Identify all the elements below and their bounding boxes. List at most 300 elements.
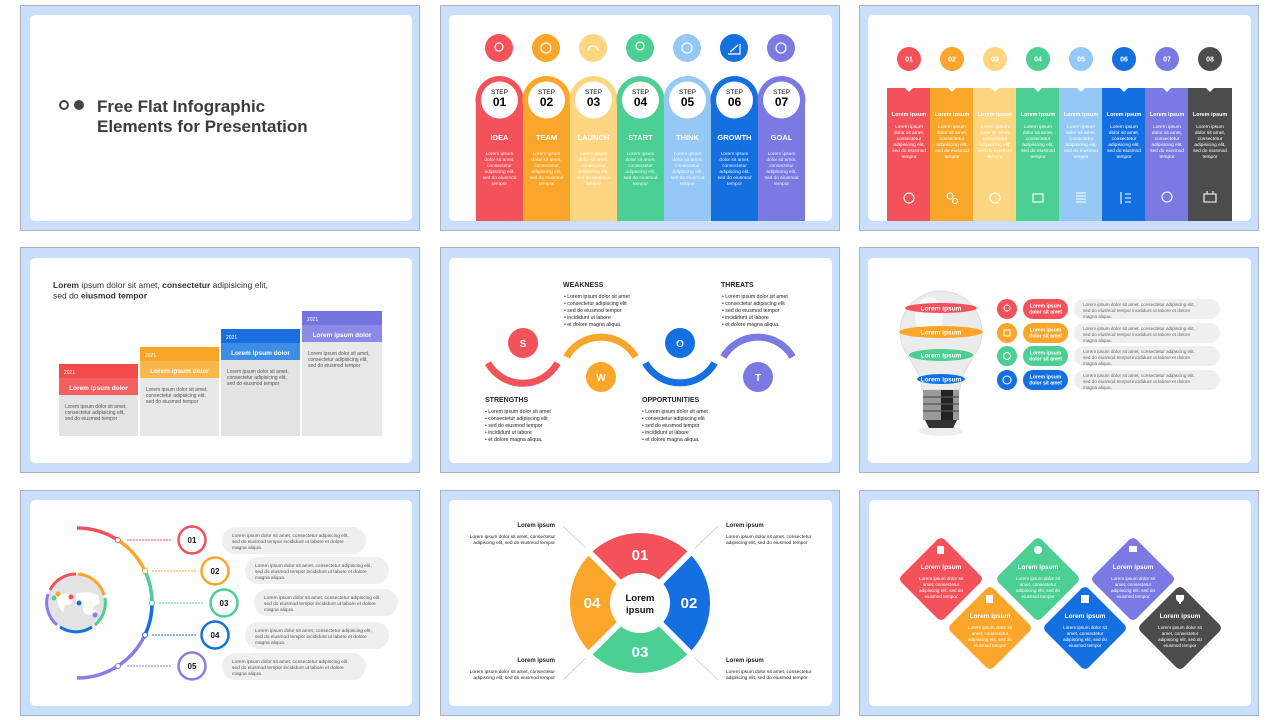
- corner texts: Lorem ipsum: [726, 658, 764, 664]
- step bar 1: [59, 364, 138, 436]
- text: opportunities: • et dolore magna aliqua.: [642, 437, 699, 443]
- number circles: 04: [1034, 56, 1042, 64]
- column texts: Lorem ipsum: [1153, 125, 1181, 130]
- text: weakness: • Lorem ipsum dolor sit amet: [564, 294, 630, 300]
- list rows: magna aliqua.: [1083, 338, 1112, 343]
- diamond texts: adipiscing elit, sed do: [1111, 588, 1155, 593]
- column texts: dolor sit amet,: [980, 130, 1010, 136]
- step bar 3: Lorem ipsum dolor sit amet,: [227, 369, 289, 375]
- diamond texts: eiusmod tempor: [1117, 594, 1150, 599]
- diamond icons: [937, 546, 1184, 604]
- step bar 4: Lorem ipsum dolor sit amet,: [308, 351, 370, 357]
- column texts: adipisicing elit,: [1022, 142, 1054, 148]
- numbered circles: 02: [211, 567, 220, 576]
- diamond texts: Lorem ipsum dolor sit: [1063, 625, 1107, 630]
- text: strengths: • consectetur adipiscing elit: [485, 416, 548, 422]
- step bars: TEAM: [536, 133, 557, 142]
- diamond texts: eiusmod tempor: [1164, 643, 1197, 648]
- step bar 3: [221, 329, 300, 436]
- text: opportunities: • Lorem ipsum dolor sit amet: [642, 409, 708, 415]
- text: opportunities: • sed do eiusmod tempor: [642, 423, 700, 429]
- step bars: 01: [493, 95, 506, 109]
- step texts: sed do eiusmod: [624, 175, 658, 181]
- step texts: consectetur: [487, 163, 512, 169]
- SWOT circles: [508, 328, 773, 392]
- step bars: GROWTH: [717, 133, 752, 142]
- step texts: consectetur: [628, 163, 653, 169]
- step bars: IDEA: [491, 133, 509, 142]
- column texts: adipisicing elit,: [1194, 142, 1226, 148]
- SWOT circles: T: [755, 373, 761, 384]
- step bar 1: 2021: [64, 370, 75, 376]
- column texts: Lorem ipsum: [938, 125, 966, 130]
- column texts: Lorem ipsum: [1110, 125, 1138, 130]
- step texts: Lorem ipsum: [533, 152, 560, 157]
- column texts: sed do eiusmod: [1193, 148, 1227, 154]
- text: opportunities: OPPORTUNITIES: [642, 397, 700, 404]
- list rows: Lorem ipsum dolor sit amet, consectetur adipiscing elit,: [1083, 302, 1195, 307]
- diamond texts: amet, consectetur: [1020, 582, 1057, 587]
- step texts: sed do eiusmod: [671, 175, 705, 181]
- step bars: 02: [540, 95, 553, 109]
- corner texts: adipiscing elit, sed do eiusmod tempor: [473, 675, 555, 681]
- diamond texts: eiusmod tempor: [1022, 594, 1055, 599]
- step texts: adipiscing elit,: [625, 169, 656, 175]
- gray text pills: Lorem ipsum dolor sit amet, consectetur adipiscing elit,: [255, 629, 372, 634]
- column texts: sed do eiusmod: [1064, 148, 1098, 154]
- ring labels: 01: [632, 547, 648, 564]
- column texts: Lorem ipsum: [1196, 125, 1224, 130]
- diamond texts: Lorem ipsum dolor sit: [1016, 576, 1060, 581]
- list rows: Lorem ipsum dolor sit amet, consectetur adipiscing elit,: [1083, 373, 1195, 378]
- step texts: adipiscing elit,: [531, 169, 562, 175]
- list rows: sed do eiusmod tempor incididunt ut labore et dolore: [1083, 355, 1190, 360]
- gray text pills: magna aliqua.: [232, 671, 262, 677]
- text: threats: • consectetur adipiscing elit: [722, 301, 785, 307]
- column texts: consectetur: [940, 136, 965, 142]
- diamond texts: eiusmod tempor: [925, 594, 958, 599]
- step bar 3: sed do eiusmod tempor: [227, 381, 280, 387]
- step bars: STEP: [538, 89, 555, 96]
- numbered circles: 04: [211, 631, 220, 640]
- text: opportunities: • consectetur adipiscing elit: [642, 416, 705, 422]
- step texts: tempor: [492, 181, 507, 187]
- bulb bands: Lorem ipsum: [921, 330, 962, 336]
- step texts: adipiscing elit,: [766, 169, 797, 175]
- step texts: Lorem ipsum: [674, 152, 701, 157]
- step bars: GOAL: [771, 133, 793, 142]
- ring segments: [570, 533, 710, 673]
- diamond texts: Lorem ipsum: [1065, 613, 1106, 620]
- text: weakness: • et dolore magna aliqua.: [564, 322, 621, 328]
- step bar 2: Lorem ipsum dolor sit amet,: [146, 387, 208, 393]
- list rows: [997, 299, 1220, 390]
- list rows: dolor sit amet: [1029, 356, 1062, 362]
- numbered circles: 05: [188, 662, 197, 671]
- diamond texts: adipiscing elit, sed do: [1016, 588, 1060, 593]
- diamond texts: amet, consectetur: [923, 582, 960, 587]
- gray text pills: Lorem ipsum dolor sit amet, consectetur adipiscing elit,: [255, 564, 372, 569]
- diamond texts: adipiscing elit, sed do: [1158, 637, 1202, 642]
- step texts: dolor sit amet,: [766, 157, 797, 163]
- bulb bands: Lorem ipsum: [921, 306, 962, 312]
- panel: globe arc: [20, 490, 420, 716]
- step bars: 05: [681, 95, 694, 109]
- step bar 4: Lorem ipsum dolor: [313, 332, 372, 339]
- column texts: sed do eiusmod: [1021, 148, 1055, 154]
- step texts: adipiscing elit,: [484, 169, 515, 175]
- gray text pills: magna aliqua.: [264, 607, 294, 613]
- column texts: tempor: [1031, 154, 1046, 160]
- diamond texts: Lorem ipsum dolor sit: [1111, 576, 1155, 581]
- bulb: [899, 291, 983, 436]
- text: strengths: [485, 397, 551, 443]
- title: Elements for Presentation: [97, 117, 308, 136]
- numbered circles: 01: [188, 536, 197, 545]
- step bar 2: consectetur adipisicing elit,: [146, 393, 206, 399]
- column texts: tempor: [902, 154, 917, 160]
- list rows: Lorem ipsum dolor sit amet, consectetur adipiscing elit,: [1083, 349, 1195, 354]
- ring labels: 04: [584, 595, 601, 612]
- list rows: magna aliqua.: [1083, 314, 1112, 319]
- step bar 4: 2021: [307, 317, 318, 323]
- panel: seven steps: [440, 6, 840, 230]
- step texts: consectetur: [581, 163, 606, 169]
- big arc: [77, 528, 152, 678]
- step bar 4: consectetur adipisicing elit,: [308, 357, 368, 363]
- list rows: dolor sit amet: [1029, 380, 1062, 386]
- panel: SWOT wave: [440, 248, 840, 472]
- column texts: consectetur: [1026, 136, 1051, 142]
- step bars: STEP: [679, 89, 696, 96]
- step bar 3: consectetur adipisicing elit,: [227, 375, 287, 381]
- column texts: tempor: [1117, 154, 1132, 160]
- diamond shapes: [898, 536, 1223, 671]
- corner texts: Lorem ipsum dolor sit amet, consectetur: [470, 670, 555, 675]
- step texts: consectetur: [675, 163, 700, 169]
- column texts: dolor sit amet,: [894, 130, 924, 136]
- step bar 2: [140, 347, 219, 436]
- text: threats: • et dolore magna aliqua.: [722, 322, 779, 328]
- ring labels: 03: [632, 644, 648, 661]
- column texts: Lorem ipsum: [892, 112, 926, 118]
- text: threats: • incididunt ut labore: [722, 315, 769, 321]
- list rows: sed do eiusmod tempor incididunt ut labore et dolore: [1083, 379, 1190, 384]
- column texts: Lorem ipsum: [1024, 125, 1052, 130]
- diamond texts: Lorem ipsum: [921, 564, 962, 571]
- step texts: tempor: [774, 181, 789, 187]
- diamond texts: amet, consectetur: [972, 631, 1009, 636]
- column texts: tempor: [1074, 154, 1089, 160]
- step bar 1: sed do eiusmod tempor: [65, 416, 118, 422]
- gray text pills: magna aliqua.: [255, 640, 285, 646]
- text: opportunities: [642, 397, 708, 443]
- text: weakness: [563, 282, 630, 328]
- column texts: adipisicing elit,: [979, 142, 1011, 148]
- columns: [887, 88, 1232, 221]
- panel: title slide: [20, 6, 420, 230]
- number circles: 07: [1163, 56, 1171, 64]
- gray text pills: sed do eiusmod tempor incididunt ut labore et dolore: [232, 539, 344, 545]
- diamond texts: eiusmod tempor: [974, 643, 1007, 648]
- text: threats: • Lorem ipsum dolor sit amet: [722, 294, 788, 300]
- step texts: consectetur: [722, 163, 747, 169]
- column texts: Lorem ipsum: [895, 125, 923, 130]
- SWOT circles: W: [596, 373, 606, 384]
- list rows: Lorem ipsum dolor sit amet, consectetur adipiscing elit,: [1083, 326, 1195, 331]
- diagonal lines: [563, 526, 718, 680]
- step texts: Lorem ipsum: [721, 152, 748, 157]
- step bar 2: 2021: [145, 353, 156, 359]
- column texts: [892, 112, 1227, 160]
- column texts: dolor sit amet,: [1023, 130, 1053, 136]
- gray text pills: Lorem ipsum dolor sit amet, consectetur adipiscing elit,: [232, 534, 349, 539]
- column texts: Lorem ipsum: [1193, 112, 1227, 118]
- number circles: 05: [1077, 56, 1085, 64]
- step texts: dolor sit amet,: [719, 157, 750, 163]
- step texts: Lorem ipsum: [580, 152, 607, 157]
- step bars: 06: [728, 95, 741, 109]
- text: strengths: • incididunt ut labore: [485, 430, 532, 436]
- text: threats: • sed do eiusmod tempor: [722, 308, 780, 314]
- panel: stepped bars: [20, 248, 420, 472]
- number circles: [897, 47, 1222, 71]
- step texts: dolor sit amet,: [672, 157, 703, 163]
- bulb bands: Lorem ipsum: [921, 352, 962, 360]
- corner texts: Lorem ipsum dolor sit amet, consectetur: [726, 670, 811, 675]
- column texts: tempor: [1160, 154, 1175, 160]
- ring labels: 02: [681, 595, 697, 612]
- step texts: Lorem ipsum: [486, 152, 513, 157]
- step bars: 03: [587, 95, 600, 109]
- text: weakness: WEAKNESS: [563, 282, 604, 289]
- numbered circles: [178, 526, 238, 680]
- text: strengths: • sed do eiusmod tempor: [485, 423, 543, 429]
- step bars: THINK: [676, 133, 700, 142]
- column texts: Lorem ipsum: [1107, 112, 1141, 118]
- step texts: dolor sit amet,: [578, 157, 609, 163]
- diamond texts: amet, consectetur: [1162, 631, 1199, 636]
- diamond texts: Lorem ipsum dolor sit: [968, 625, 1012, 630]
- step bars: [476, 76, 806, 221]
- corner texts: Lorem ipsum dolor sit amet, consectetur: [726, 535, 811, 540]
- step bar 3: Lorem ipsum dolor: [231, 350, 290, 357]
- step texts: sed do eiusmod: [765, 175, 799, 181]
- column texts: dolor sit amet,: [1066, 130, 1096, 136]
- column texts: sed do eiusmod: [1107, 148, 1141, 154]
- column texts: Lorem ipsum: [1150, 112, 1184, 118]
- step bar 2: sed do eiusmod tempor: [146, 399, 199, 405]
- wave arcs: [488, 337, 793, 383]
- step texts: sed do eiusmod: [718, 175, 752, 181]
- diamond texts: Lorem ipsum dolor sit: [919, 576, 963, 581]
- gray text pills: Lorem ipsum dolor sit amet, consectetur adipiscing elit,: [232, 660, 349, 665]
- step texts: dolor sit amet,: [484, 157, 515, 163]
- column texts: tempor: [945, 154, 960, 160]
- text: threats: [721, 282, 788, 328]
- step bars: LAUNCH: [578, 133, 609, 142]
- gray text pills: sed do eiusmod tempor incididunt ut labore et dolore: [255, 634, 367, 640]
- list rows: sed do eiusmod tempor incididunt ut labore et dolore: [1083, 332, 1190, 337]
- column texts: consectetur: [1155, 136, 1180, 142]
- diamond texts: adipiscing elit, sed do: [968, 637, 1012, 642]
- column texts: sed do eiusmod: [935, 148, 969, 154]
- corner texts: [470, 523, 812, 681]
- step texts: consectetur: [534, 163, 559, 169]
- center text: Lorem: [625, 593, 655, 604]
- column texts: Lorem ipsum: [978, 112, 1012, 118]
- step bar 1: Lorem ipsum dolor: [69, 385, 128, 392]
- title: Free Flat Infographic: [97, 97, 265, 116]
- heading text: eiusmod tempor: [81, 290, 148, 300]
- column texts: dolor sit amet,: [937, 130, 967, 136]
- ring labels: [584, 547, 697, 661]
- column texts: Lorem ipsum: [981, 125, 1009, 130]
- step bars: STEP: [726, 89, 743, 96]
- step bars: STEP: [491, 89, 508, 96]
- step bars: START: [628, 133, 653, 142]
- step texts: dolor sit amet,: [531, 157, 562, 163]
- step texts: sed do eiusmod: [483, 175, 517, 181]
- gray text pills: magna aliqua.: [232, 545, 262, 551]
- number circles: 08: [1206, 56, 1214, 64]
- step texts: sed do eiusmod: [577, 175, 611, 181]
- column texts: tempor: [988, 154, 1003, 160]
- diamond texts: Lorem ipsum: [1113, 564, 1154, 571]
- diamond texts: amet, consectetur: [1067, 631, 1104, 636]
- diamond texts: Lorem ipsum dolor sit: [1158, 625, 1202, 630]
- column texts: consectetur: [1198, 136, 1223, 142]
- step bar 4: [302, 311, 382, 436]
- list rows: dolor sit amet: [1029, 334, 1062, 340]
- step texts: tempor: [586, 181, 601, 187]
- step texts: tempor: [633, 181, 648, 187]
- text: weakness: • incididunt ut labore: [564, 315, 611, 321]
- column texts: Lorem ipsum: [935, 112, 969, 118]
- step bars: STEP: [585, 89, 602, 96]
- icon: two dots: [60, 100, 84, 110]
- corner texts: adipiscing elit, sed do eiusmod tempor: [726, 675, 808, 681]
- connectors: [115, 538, 204, 668]
- diamond texts: adipiscing elit, sed do: [919, 588, 963, 593]
- text: strengths: • et dolore magna aliqua.: [485, 437, 542, 443]
- number circles: 06: [1120, 56, 1128, 64]
- diamond texts: Lorem ipsum: [1018, 564, 1059, 571]
- list rows: sed do eiusmod tempor incididunt ut labore et dolore: [1083, 308, 1190, 313]
- globe: [47, 574, 105, 632]
- list rows: magna aliqua.: [1083, 385, 1112, 390]
- corner texts: Lorem ipsum: [517, 658, 555, 664]
- gray text pills: sed do eiusmod tempor incididunt ut labore et dolore: [264, 601, 376, 607]
- column texts: adipisicing elit,: [936, 142, 968, 148]
- column texts: Lorem ipsum: [1021, 112, 1055, 118]
- number circles: 01: [905, 56, 913, 64]
- step texts: Lorem ipsum: [768, 152, 795, 157]
- column texts: sed do eiusmod: [1150, 148, 1184, 154]
- step texts: [483, 151, 799, 187]
- gray text pills: [222, 527, 398, 680]
- step bar 1: Lorem ipsum dolor sit amet,: [65, 404, 127, 410]
- column texts: adipisicing elit,: [1108, 142, 1140, 148]
- gray text pills: magna aliqua.: [255, 575, 285, 581]
- center text: ipsum: [626, 605, 654, 616]
- number circles: 03: [991, 56, 999, 64]
- panel: diamonds: [860, 490, 1258, 716]
- SWOT circles: O: [676, 339, 684, 350]
- gray text pills: sed do eiusmod tempor incididunt ut labore et dolore: [255, 569, 367, 575]
- column texts: dolor sit amet,: [1195, 130, 1225, 136]
- panel: four-part ring: [440, 490, 840, 716]
- column texts: adipisicing elit,: [1151, 142, 1183, 148]
- column texts: consectetur: [983, 136, 1008, 142]
- panel: light bulb: [860, 248, 1258, 472]
- diamond texts: amet, consectetur: [1115, 582, 1152, 587]
- step texts: adipiscing elit,: [672, 169, 703, 175]
- column texts: consectetur: [1069, 136, 1094, 142]
- heading text: sed do: [53, 290, 81, 300]
- corner texts: Lorem ipsum: [517, 523, 555, 529]
- SWOT circles: S: [520, 339, 527, 350]
- diamond texts: Lorem ipsum: [970, 613, 1011, 620]
- diamond texts: adipiscing elit, sed do: [1063, 637, 1107, 642]
- column texts: tempor: [1203, 154, 1218, 160]
- gray text pills: sed do eiusmod tempor incididunt ut labore et dolore: [232, 665, 344, 671]
- column texts: sed do eiusmod: [978, 148, 1012, 154]
- step texts: tempor: [727, 181, 742, 187]
- step bar 2: Lorem ipsum dolor: [150, 368, 209, 375]
- column texts: Lorem ipsum: [1067, 125, 1095, 130]
- corner texts: Lorem ipsum dolor sit amet, consectetur: [470, 535, 555, 540]
- diamond texts: eiusmod tempor: [1069, 643, 1102, 648]
- step bar 4: sed do eiusmod tempor: [308, 363, 361, 369]
- column texts: dolor sit amet,: [1152, 130, 1182, 136]
- step bars: STEP: [773, 89, 790, 96]
- step texts: adipiscing elit,: [719, 169, 750, 175]
- panel: eight columns: [860, 6, 1258, 230]
- corner texts: adipiscing elit, sed do eiusmod tempor: [726, 540, 808, 546]
- corner texts: adipiscing elit, sed do eiusmod tempor: [473, 540, 555, 546]
- step bar 3: 2021: [226, 335, 237, 341]
- text: opportunities: • incididunt ut labore: [642, 430, 689, 436]
- step bars: 07: [775, 95, 788, 109]
- list rows: Lorem ipsum: [1030, 328, 1061, 334]
- step texts: Lorem ipsum: [627, 152, 654, 157]
- bulb bands: [899, 303, 983, 384]
- step texts: sed do eiusmod: [530, 175, 564, 181]
- text: weakness: • consectetur adipiscing elit: [564, 301, 627, 307]
- step bars: STEP: [632, 89, 649, 96]
- column texts: adipisicing elit,: [1065, 142, 1097, 148]
- step bar 1: consectetur adipisicing elit,: [65, 410, 125, 416]
- heading text: Lorem ipsum dolor sit amet, consectetur adipisicing elit,: [53, 280, 268, 290]
- step texts: dolor sit amet,: [625, 157, 656, 163]
- diamond texts: Lorem ipsum: [1160, 613, 1201, 620]
- step bars: 04: [634, 95, 647, 109]
- column texts: consectetur: [1112, 136, 1137, 142]
- column texts: dolor sit amet,: [1109, 130, 1139, 136]
- number circles: 02: [948, 56, 956, 64]
- list rows: Lorem ipsum: [1030, 374, 1061, 380]
- text: weakness: • sed do eiusmod tempor: [564, 308, 622, 314]
- step texts: tempor: [539, 181, 554, 187]
- corner texts: Lorem ipsum: [726, 523, 764, 529]
- column texts: Lorem ipsum: [1064, 112, 1098, 118]
- column icons: [904, 191, 1216, 204]
- step texts: consectetur: [769, 163, 794, 169]
- column texts: consectetur: [897, 136, 922, 142]
- gray text pills: Lorem ipsum dolor sit amet, consectetur adipiscing elit,: [264, 596, 381, 601]
- step texts: tempor: [680, 181, 695, 187]
